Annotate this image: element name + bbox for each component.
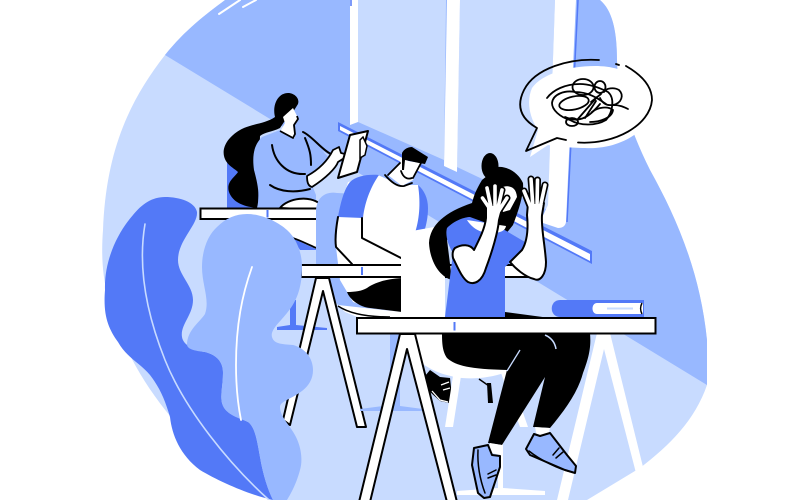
thumb <box>360 137 367 158</box>
left shoe <box>472 445 500 498</box>
arm outlines <box>336 217 401 264</box>
face <box>280 108 298 138</box>
hair <box>402 147 428 170</box>
window sill <box>338 122 592 264</box>
legs <box>347 278 402 312</box>
long hair <box>224 93 298 208</box>
left sleeve <box>338 175 379 218</box>
right shoe <box>526 433 576 473</box>
socks <box>488 427 550 455</box>
paper <box>338 131 368 178</box>
right trestle legs <box>557 333 643 500</box>
leaf: light blue <box>187 214 313 500</box>
collar <box>467 220 506 233</box>
sweater <box>253 130 345 208</box>
front desk legs <box>359 334 457 500</box>
hair bun <box>482 153 498 179</box>
back woman <box>224 93 368 210</box>
middle desk <box>301 265 531 277</box>
front chair <box>401 225 545 495</box>
speech bubble <box>520 60 653 157</box>
blue top <box>445 217 525 317</box>
right arm and hand <box>510 179 546 280</box>
trousers <box>442 333 590 445</box>
man's shoe <box>425 370 452 403</box>
window <box>350 0 578 228</box>
face <box>388 160 421 186</box>
arm and hand <box>307 147 349 187</box>
front desk <box>357 318 656 334</box>
lap <box>280 199 320 210</box>
man's chair <box>316 193 402 318</box>
right sleeve <box>415 185 428 233</box>
neck and jaw lines <box>385 163 421 186</box>
scribble <box>547 79 628 126</box>
background blob <box>102 0 707 500</box>
back desk <box>200 208 318 250</box>
leaf: dark blue <box>105 197 273 500</box>
chair shadow and base <box>360 333 423 411</box>
left arm and hand <box>453 186 507 283</box>
middle desk legs <box>283 278 366 427</box>
long hair <box>429 167 523 280</box>
chair: back woman <box>227 160 327 330</box>
sweater lines <box>270 132 340 191</box>
front woman <box>429 153 590 498</box>
shirt and lower body <box>336 175 428 312</box>
face <box>498 186 517 212</box>
book <box>552 300 644 317</box>
man <box>336 147 428 312</box>
